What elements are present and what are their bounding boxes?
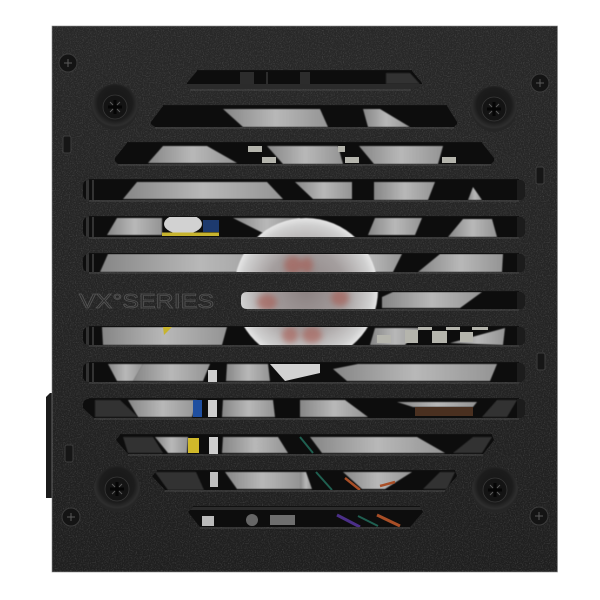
side tab	[46, 393, 53, 498]
fan seen through the grille	[80, 60, 530, 540]
slot upper edge shadow	[89, 70, 519, 506]
lip of top and bottom slots	[187, 84, 424, 510]
logo: VX Series: VX°SERIES	[79, 291, 214, 313]
screw: top left	[92, 84, 138, 130]
small rectangular holes	[63, 136, 545, 462]
screw: bottom right	[472, 467, 518, 513]
small screw marks	[64, 59, 544, 521]
hub rim below centre	[270, 364, 320, 381]
illustration: power supply fan side	[46, 26, 558, 572]
screw: top right	[471, 86, 517, 132]
hub red glow spots	[257, 256, 349, 343]
coloured wires and parts	[162, 220, 473, 527]
fan hub	[236, 217, 379, 345]
fan blades	[100, 109, 505, 489]
capacitor	[164, 217, 202, 232]
electronics chips	[202, 146, 488, 526]
panel: front plate	[52, 26, 558, 572]
inner shaded parts	[95, 73, 517, 490]
small corner screws	[59, 54, 549, 526]
screw: bottom left	[94, 466, 140, 512]
panel texture	[52, 26, 557, 572]
slot end walls	[86, 180, 525, 418]
slot edge highlights	[89, 90, 519, 528]
heat sink at top slot	[240, 72, 310, 84]
